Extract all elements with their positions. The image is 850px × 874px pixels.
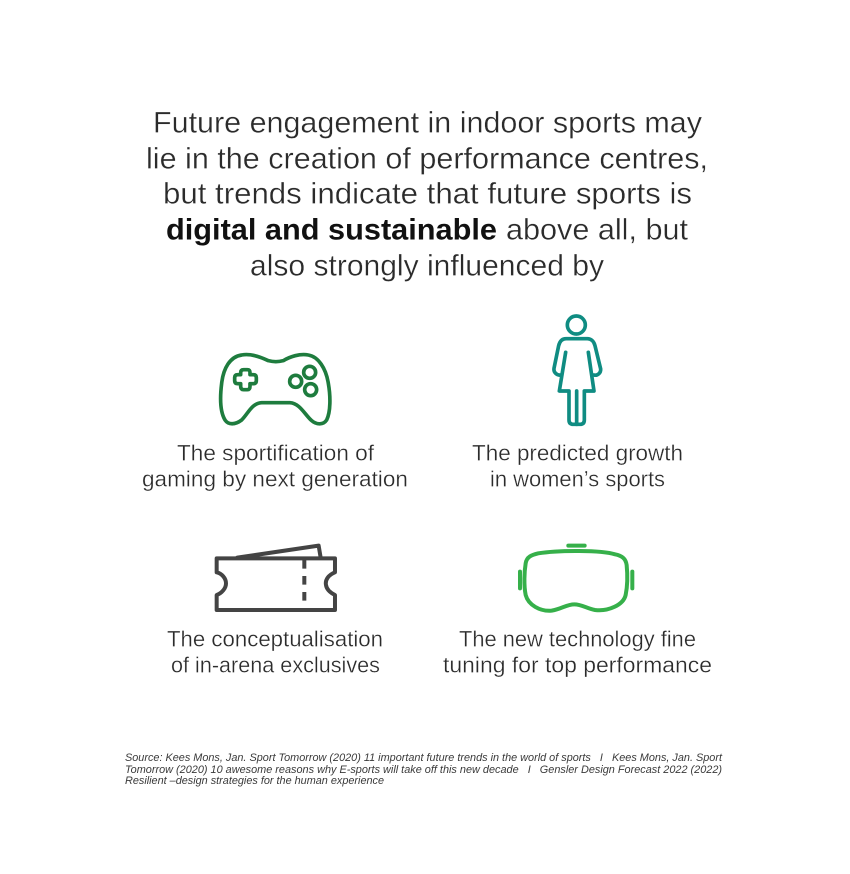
caption: women's sports: in women’s sports	[490, 466, 665, 491]
icon: VR headset	[520, 546, 632, 611]
caption: gaming: The sportification of	[177, 440, 375, 465]
title	[146, 106, 708, 282]
icon: woman	[554, 316, 601, 424]
caption: in-arena exclusives: The conceptualisation	[167, 626, 383, 651]
caption: women's sports: The predicted growth	[472, 440, 683, 465]
caption: in-arena exclusives	[167, 626, 383, 677]
title: digital and sustainable	[166, 213, 497, 246]
source note	[125, 752, 723, 787]
caption: new technology: tuning for top performance	[443, 652, 712, 677]
title: also strongly influenced by	[250, 249, 604, 282]
title: but trends indicate that future sports is	[163, 178, 692, 211]
title: lie in the creation of performance centres,	[146, 142, 708, 175]
caption: gaming	[142, 440, 408, 491]
title: Future engagement in indoor sports may	[153, 106, 702, 139]
icon: game controller	[221, 355, 330, 424]
icon: ticket	[217, 546, 335, 610]
caption: in-arena exclusives: of in-arena exclusives	[171, 652, 380, 677]
title: above all, but	[506, 213, 688, 246]
caption: new technology: The new technology fine	[459, 626, 696, 651]
caption: gaming: gaming by next generation	[142, 466, 408, 491]
caption: new technology	[443, 626, 712, 677]
source note: Resilient –design strategies for the human experience	[125, 775, 384, 787]
caption: women's sports	[472, 440, 683, 491]
source note: Tomorrow (2020) 10 awesome reasons why E-sports will take off this new decade I Gensler Design Forecast 2022 (2022)	[125, 764, 722, 776]
source note: Source: Kees Mons, Jan. Sport Tomorrow (2020) 11 important future trends in the world of sports I Kees Mons, Jan. Sport	[125, 752, 723, 764]
